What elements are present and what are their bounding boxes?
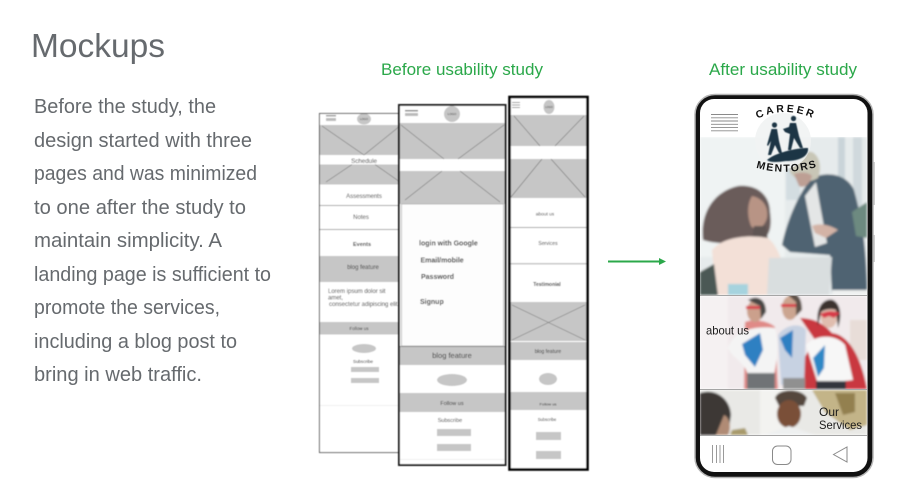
- phone body: [695, 94, 873, 478]
- wireframe: login page: LOGO: [448, 112, 457, 116]
- hand: [812, 224, 838, 238]
- logo: career mentors: CAREER: [756, 104, 814, 118]
- capes: [800, 318, 867, 389]
- arrow: [608, 258, 666, 265]
- wireframe: login page: Password: [421, 274, 454, 281]
- text block: study description: maintain simplicity. A: [34, 230, 223, 252]
- text block: study description: including a blog post to: [34, 331, 237, 353]
- wireframe: schedule page: amet,: [328, 296, 343, 302]
- wireframe: landing page: about us: [536, 212, 555, 218]
- person 2: [778, 325, 806, 385]
- wireframe: landing page: LOGO: [545, 105, 553, 109]
- wireframe: landing page: Subscribe: [538, 417, 557, 422]
- wireframe: schedule page: Events: [353, 242, 371, 248]
- text block: study description: to one after the study to: [34, 197, 246, 219]
- text block: study description: design started with three: [34, 130, 252, 152]
- logo: career mentors: MENTORS: [756, 160, 816, 172]
- text block: study description: promote the services,: [34, 297, 220, 319]
- wireframe: schedule page: [319, 113, 403, 453]
- title: Mockups: [31, 28, 165, 65]
- wireframe: landing page: Services: [538, 241, 558, 247]
- phone mockup: [694, 94, 875, 478]
- wireframe: schedule page: LOGO: [360, 117, 369, 121]
- left woman shirt: [712, 236, 787, 295]
- blouse: [805, 182, 827, 247]
- text block: study description: landing page is sufficient to: [34, 264, 271, 286]
- wireframe: schedule page: consectetur adipiscing elit.: [329, 302, 400, 308]
- icon: home button: [772, 446, 791, 464]
- wireframe: login page: Follow us: [440, 401, 464, 407]
- plant: [852, 202, 867, 238]
- wireframe: landing page: Testimonial: [533, 282, 561, 288]
- label: our services: Services: [819, 418, 862, 432]
- wireframe: schedule page: Lorem ipsum dolor sit: [328, 289, 386, 295]
- icon: back button: [834, 447, 847, 462]
- photo: about us team in capes: [700, 294, 867, 389]
- hair and face of right woman: [790, 152, 820, 181]
- left woman face: [748, 196, 767, 229]
- icon: hamburger menu: [711, 114, 738, 131]
- wireframe: landing page: Follow us: [540, 402, 556, 406]
- wireframe: login page: Signup: [420, 299, 444, 306]
- wireframe: login page: blog feature: [432, 351, 472, 360]
- wireframe: login page: login with Google: [419, 240, 478, 248]
- wireframe: schedule page: Schedule: [351, 158, 377, 165]
- logo: career mentors: [756, 104, 816, 172]
- laptop: [767, 257, 832, 295]
- left woman hair: [703, 186, 771, 243]
- dividers between photos: [700, 296, 867, 436]
- wireframe: schedule page: Follow us: [349, 326, 369, 331]
- text block: study description: pages and was minimized: [34, 163, 257, 185]
- phone side buttons: [873, 162, 875, 262]
- person 3: [806, 337, 853, 384]
- wireframe: landing page: blog feature: [535, 349, 561, 355]
- wireframe: schedule page: Subscribe: [353, 359, 374, 364]
- label: our services: [819, 405, 862, 432]
- wireframe: login page: Subscribe: [438, 418, 462, 424]
- wireframe: landing page: [510, 97, 588, 470]
- text block: study description: Before the study, the: [34, 96, 216, 118]
- wireframe: login page: Email/mobile: [420, 258, 464, 264]
- label: about us: about us: [706, 324, 749, 338]
- heading: before usability study: Before usability study: [381, 60, 543, 79]
- heading: after usability study: After usability study: [709, 60, 857, 79]
- photo: our services consultation: [700, 390, 867, 435]
- wireframe: schedule page: Notes: [353, 215, 369, 221]
- text block: study description: [34, 96, 271, 386]
- wireframe: schedule page: blog feature: [347, 265, 380, 271]
- person 1: [728, 327, 777, 375]
- wireframe: login page: [399, 105, 506, 465]
- right woman jacket: [782, 174, 867, 295]
- phone screen: [700, 99, 868, 472]
- label: our services: Our: [819, 405, 839, 419]
- icon: recent apps: [712, 445, 724, 463]
- photo: two women at laptop: [700, 137, 867, 295]
- wireframe: schedule page: Assessments: [346, 194, 382, 200]
- text block: study description: bring in web traffic.: [34, 364, 202, 386]
